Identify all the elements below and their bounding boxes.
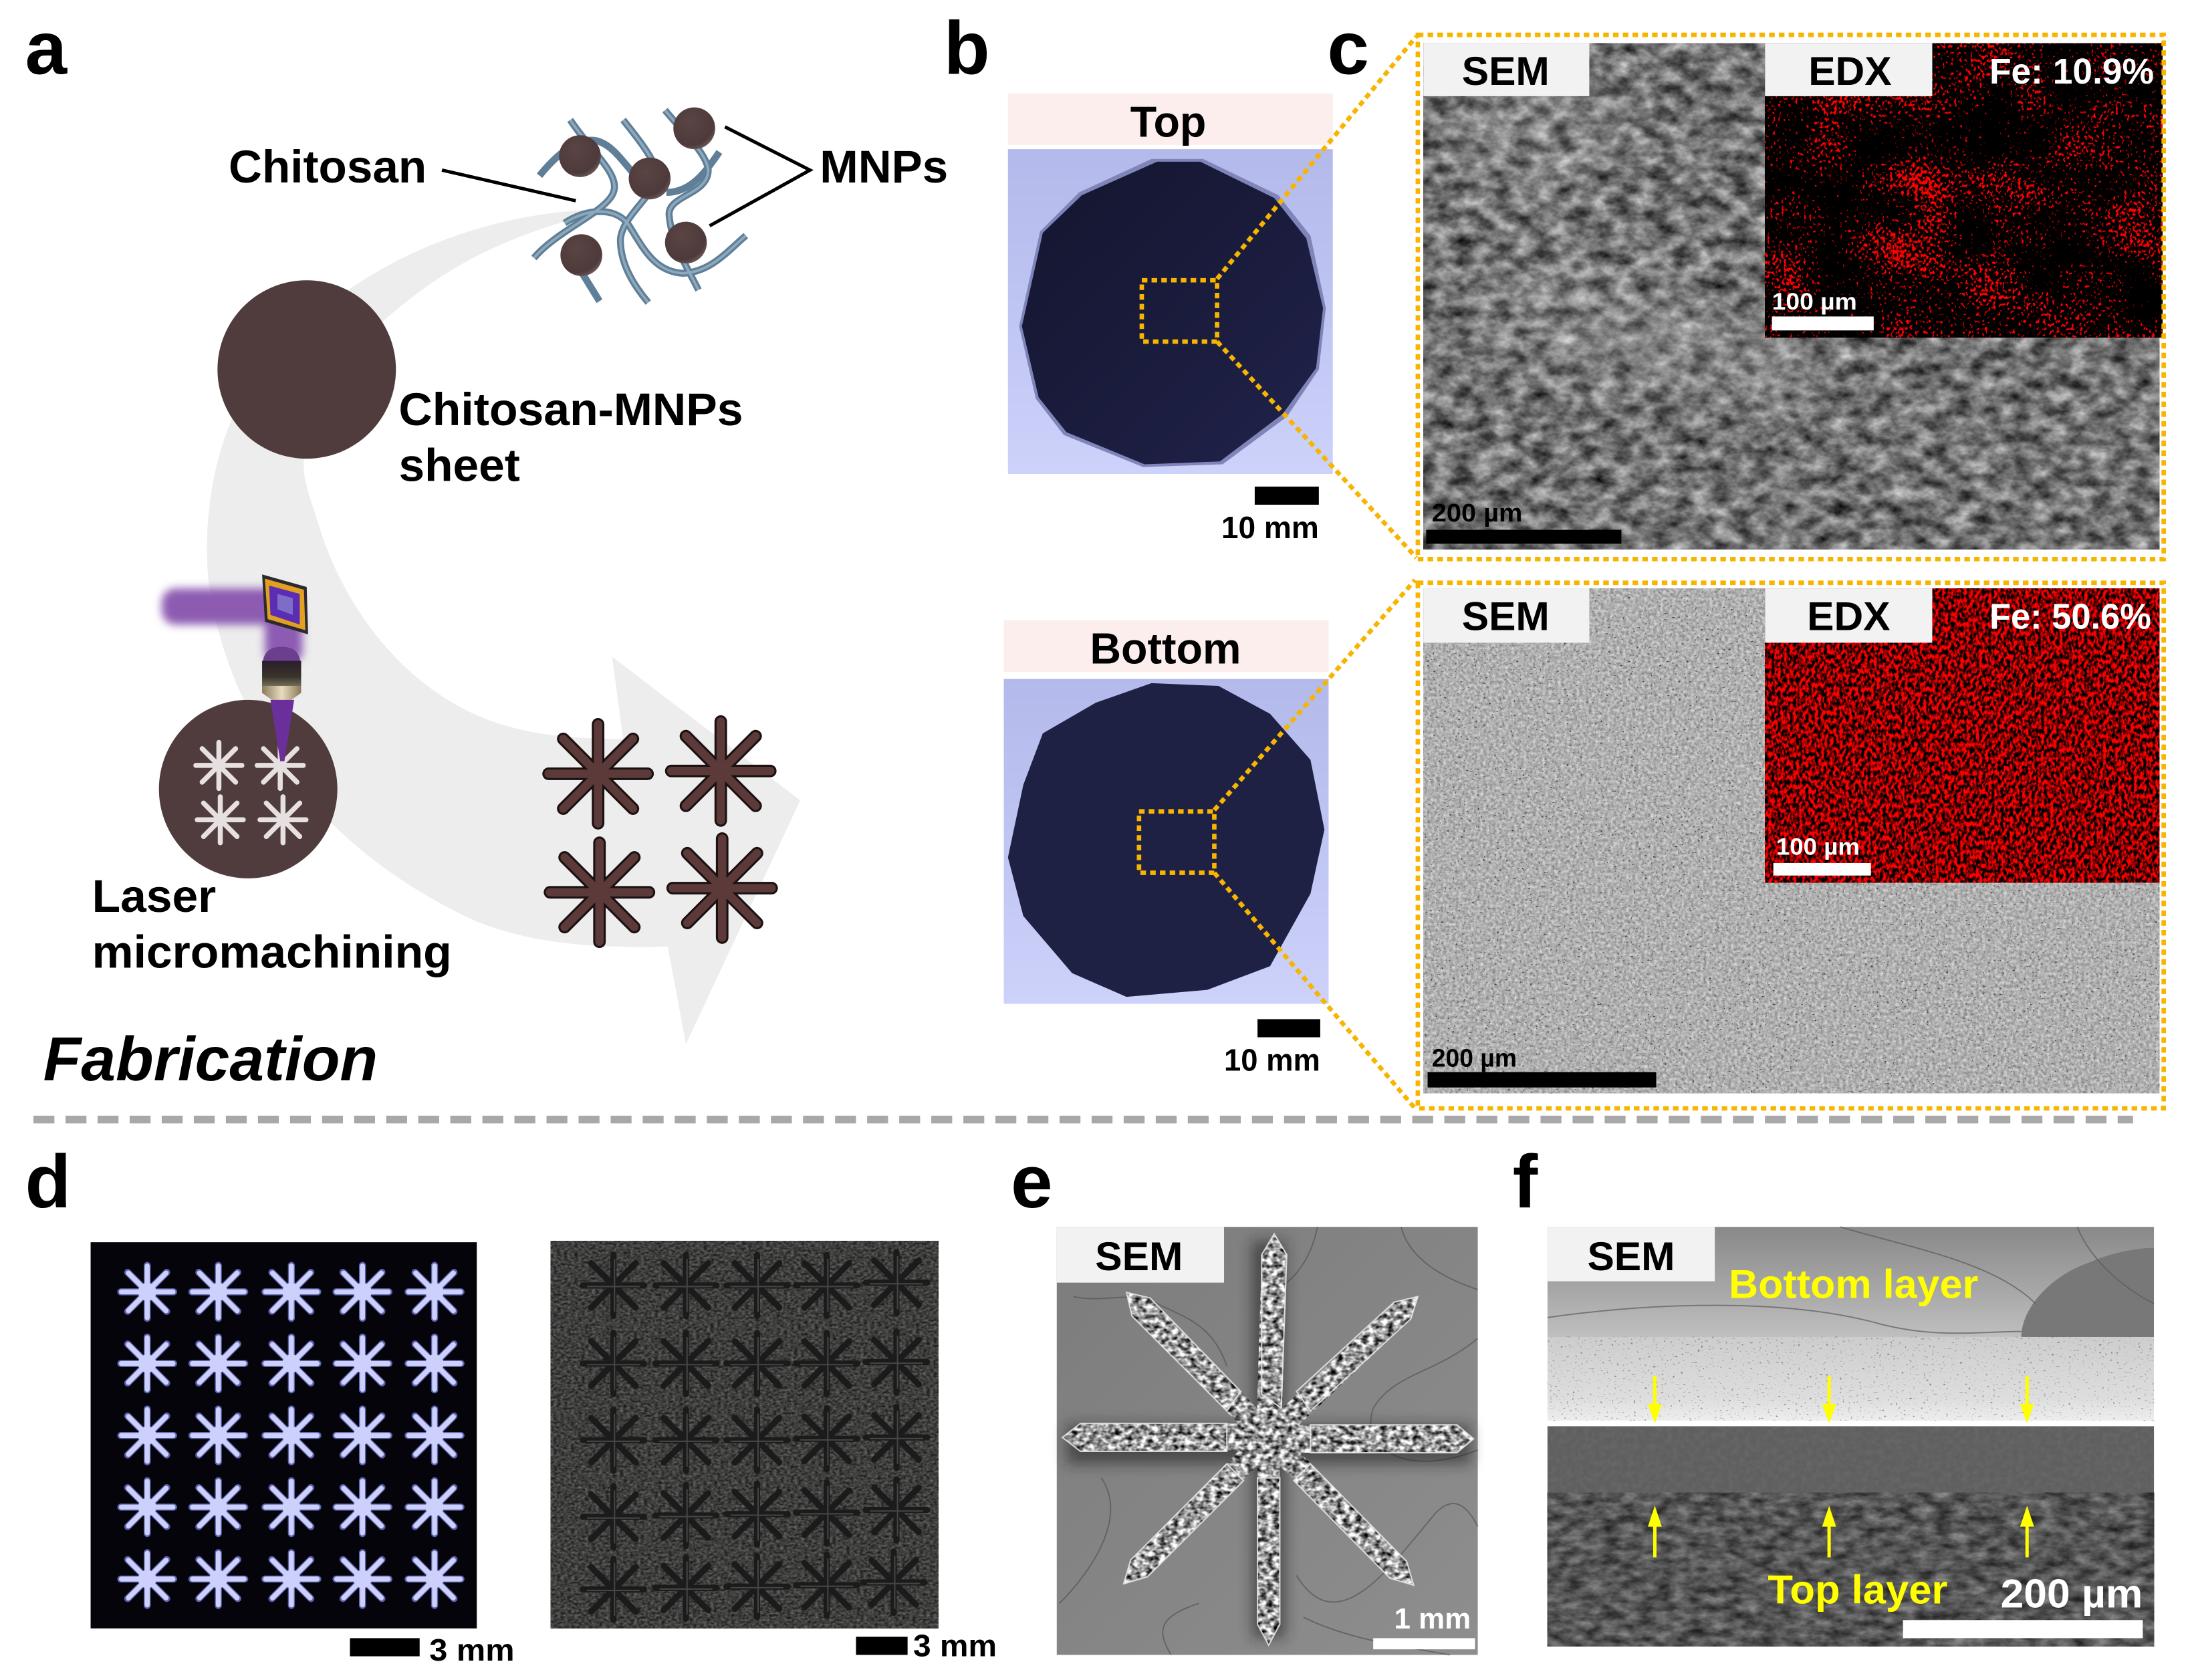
- label: Bottom layer: Bottom layer: [1729, 1262, 1978, 1307]
- tag: SEM: SEM: [1587, 1233, 1675, 1279]
- SEM background with cracks: [1057, 1227, 1478, 1655]
- SEM scale bar: 200 µm: [1426, 499, 1621, 544]
- bottom photo group: [1004, 620, 1328, 1078]
- dashed zoom callout: bottom: [1139, 580, 2164, 1108]
- scanning mirror: [262, 574, 308, 634]
- panel e: SEM of star microneedle: [1011, 1139, 1478, 1655]
- EDX scale bar: 100 µm: 100 µm: [1776, 833, 1860, 860]
- focused laser cone: [271, 700, 294, 761]
- panel letter c: c: [1327, 6, 1369, 90]
- laser beam: [162, 588, 303, 661]
- tag: SEM: [1423, 588, 1589, 642]
- SEM scale bar: 200 µm: [1428, 1044, 1657, 1088]
- panel letter d: d: [25, 1139, 71, 1223]
- header: Bottom: [1004, 620, 1328, 673]
- header: Top: [1008, 94, 1333, 146]
- header: Bottom: Bottom: [1090, 624, 1241, 673]
- EDX scale bar: 100 µm: [1772, 288, 1874, 330]
- tag: SEM: SEM: [1095, 1233, 1183, 1279]
- curved process arrow: [207, 209, 800, 1044]
- tag: EDX: [1765, 588, 1932, 642]
- label: Chitosan-MNPs sheet: sheet: [398, 439, 520, 491]
- value: Fe 10.9%: Fe: 10.9%: [1989, 51, 2154, 92]
- objective lens: [262, 647, 301, 700]
- tag: EDX: EDX: [1808, 48, 1892, 94]
- panel b: sheet photographs: [944, 6, 1333, 1078]
- tag: SEM: SEM: [1462, 48, 1550, 94]
- scale bar: 200 µm: [1903, 1571, 2143, 1638]
- tag: SEM: [1548, 1227, 1715, 1282]
- leader line: MNPs: [709, 127, 810, 226]
- heading: Fabrication: Fabrication: [43, 1024, 378, 1094]
- mold image: bright stars on black: [91, 1242, 477, 1629]
- EDX iron map: [1765, 43, 2163, 338]
- scale bar: 3 mm: [856, 1629, 997, 1663]
- star microneedle: [1062, 1234, 1473, 1645]
- tag: EDX: EDX: [1807, 594, 1890, 639]
- label: Laser micromachining: Laser: [92, 870, 216, 922]
- section divider: [33, 1118, 2133, 1121]
- SEM image: smooth bottom surface: [1423, 588, 2159, 1093]
- released microneedle stars: [549, 721, 771, 942]
- panel c: SEM and EDX micrographs: [1139, 6, 2164, 1108]
- laser optics icon: [162, 574, 308, 761]
- scale bar: 10 mm: 10 mm: [1221, 510, 1319, 545]
- top SEM/EDX group: [1142, 35, 2164, 559]
- panel f: SEM cross-section: [1513, 1139, 2154, 1647]
- cross-section image layers: [1548, 1227, 2154, 1647]
- scale bar: 10 mm: 10 mm: [1224, 1043, 1320, 1078]
- textured arms: [1062, 1234, 1473, 1645]
- magnetic nanoparticles: [559, 108, 715, 276]
- leader line: chitosan: [442, 170, 576, 201]
- scale bar: 3 mm: [350, 1633, 515, 1667]
- panel letter f: f: [1513, 1139, 1538, 1223]
- label: Top layer: Top layer: [1768, 1566, 1947, 1612]
- label: Laser micromachining: micromachining: [92, 926, 452, 977]
- header: Top: Top: [1130, 97, 1206, 146]
- EDX scale bar: 100 µm: 100 µm: [1772, 288, 1857, 315]
- panel letter b: b: [944, 6, 990, 90]
- polymer strands: [534, 110, 746, 303]
- tag: SEM: SEM: [1462, 594, 1550, 639]
- panel d: microneedle array images: [25, 1139, 997, 1667]
- machined disc with star cut-outs: [159, 700, 338, 878]
- EDX scale bar: 100 µm: [1774, 833, 1871, 876]
- panel letter e: e: [1011, 1139, 1053, 1223]
- photo: top side of sheet: [1008, 149, 1333, 474]
- SEM image: rough top surface: [1423, 43, 2159, 550]
- bottom SEM/EDX group: [1139, 580, 2164, 1108]
- SEM scale bar: 200 µm: 200 µm: [1432, 1044, 1517, 1072]
- label: Chitosan-MNPs sheet: Chitosan-MNPs: [398, 384, 743, 435]
- scale bar: 1 mm: 1 mm: [1394, 1602, 1471, 1635]
- photo image: dark stars on textured sheet: [551, 1241, 939, 1629]
- panel letter a: a: [25, 6, 68, 90]
- tag: EDX: [1765, 43, 1932, 96]
- scale bar: 10 mm: [1221, 487, 1319, 545]
- tag: SEM: [1057, 1227, 1224, 1283]
- SEM scale bar: 200 µm: 200 µm: [1432, 499, 1522, 527]
- scale bar: 3 mm: 3 mm: [913, 1629, 997, 1663]
- value: Fe 50.6%: Fe: 50.6%: [1989, 597, 2151, 637]
- shadow: [1066, 1241, 1471, 1638]
- thickness arrows: top layer: [1648, 1506, 2034, 1557]
- tag: SEM: [1423, 43, 1589, 96]
- scale bar: 200 µm: 200 µm: [2001, 1571, 2143, 1616]
- EDX iron map: [1765, 588, 2159, 882]
- top photo group: [1008, 94, 1333, 545]
- label: MNPs: MNPs: [820, 141, 948, 193]
- scale bar: 3 mm: 3 mm: [429, 1633, 515, 1667]
- panel a: fabrication schematic: [25, 6, 948, 1094]
- dashed zoom callout: top: [1142, 35, 2164, 559]
- scale bar: 1 mm: [1373, 1602, 1475, 1649]
- thickness arrows: bottom layer: [1648, 1376, 2034, 1423]
- chitosan-MNPs sheet disc: [217, 280, 396, 459]
- bright arm edges: [1062, 1234, 1473, 1645]
- label: Chitosan: Chitosan: [229, 141, 427, 193]
- scale bar: 10 mm: [1224, 1019, 1320, 1078]
- photo: bottom side of sheet: [1004, 679, 1328, 1004]
- chitosan MNP network icon: [534, 108, 746, 303]
